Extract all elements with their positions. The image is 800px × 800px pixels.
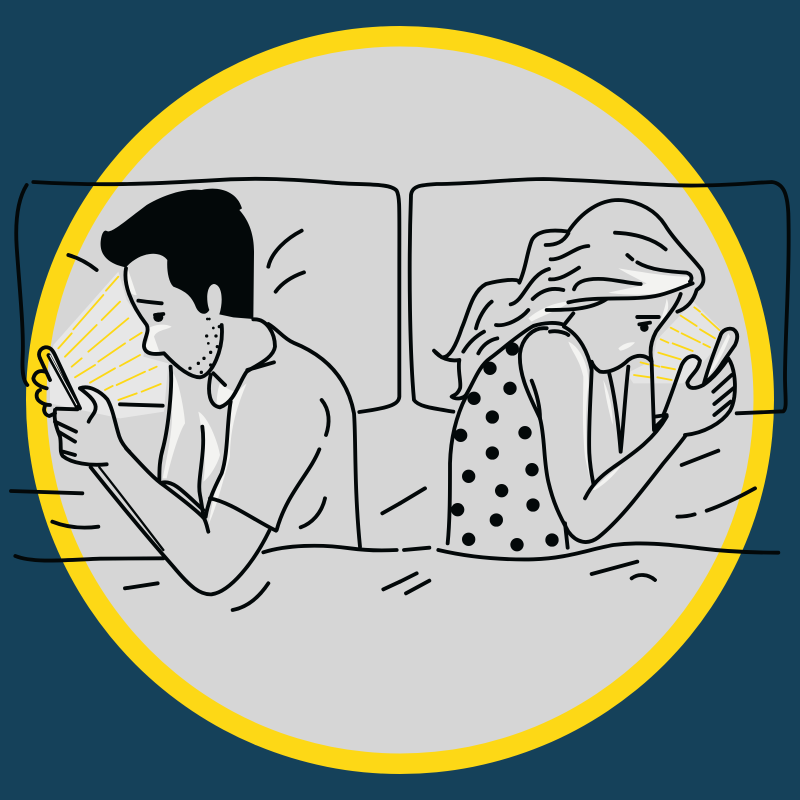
t-shirt: man bbox=[159, 319, 360, 547]
phone light cone: woman bbox=[627, 302, 720, 383]
face outline: man bbox=[125, 268, 225, 385]
polka dots: woman bbox=[451, 342, 559, 551]
face and neck highlights: man bbox=[125, 268, 247, 525]
highlights: woman bbox=[528, 268, 730, 490]
stubble: man bbox=[188, 318, 221, 374]
pillow: right bbox=[410, 179, 789, 413]
light rays: woman bbox=[634, 307, 719, 380]
phone light cone: man bbox=[50, 272, 168, 418]
dress and arm: woman bbox=[448, 327, 686, 548]
eye: man bbox=[153, 313, 163, 322]
left half: man bbox=[11, 179, 400, 610]
grey disc bbox=[46, 46, 754, 754]
hand and phone: man bbox=[33, 347, 129, 465]
arm and sleeve: man bbox=[91, 448, 276, 594]
light rays: man bbox=[58, 277, 161, 400]
face and neck: woman bbox=[592, 294, 681, 452]
bed and motion strokes: left bbox=[11, 231, 400, 610]
hair: man bbox=[101, 189, 254, 319]
pillow: left bbox=[16, 179, 399, 412]
right half: woman bbox=[400, 179, 789, 593]
hand and phone: woman bbox=[663, 329, 737, 435]
hair: woman bbox=[434, 200, 703, 398]
bed and motion strokes: right bbox=[400, 451, 778, 593]
